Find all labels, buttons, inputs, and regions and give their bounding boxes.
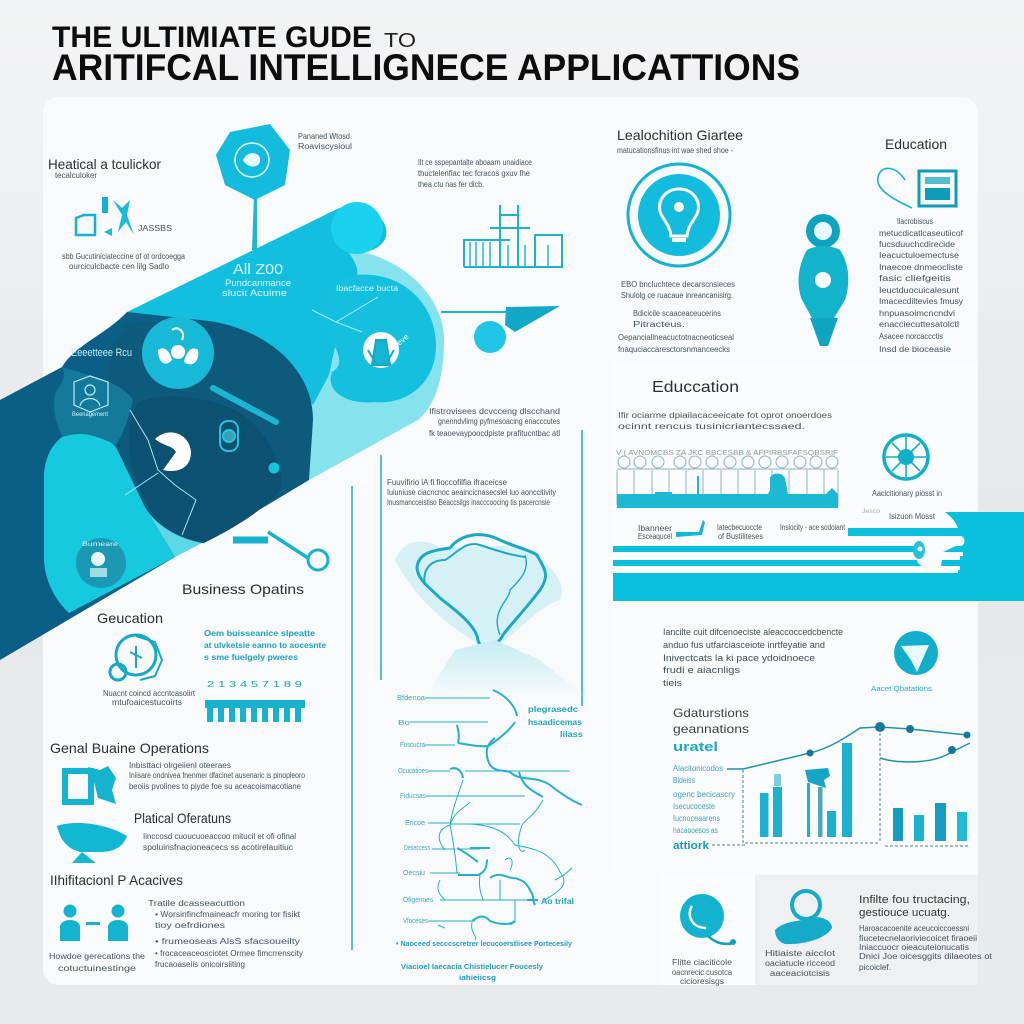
- network side label: hsaadicemas: [528, 717, 582, 727]
- branches: [457, 690, 582, 805]
- icon: key with wedge: [441, 306, 560, 353]
- education text column: Ilacrobiscus: [897, 217, 933, 226]
- network caption: Viacioel Iaecacia Chistielucer Foucesly: [401, 962, 544, 971]
- icon: magnifier blob: [680, 894, 736, 945]
- intro text block: [418, 158, 532, 189]
- chart legend labels: ogenc becicascry: [673, 790, 735, 799]
- geucation small text: Nuacnt coincd accntcasoiirt: [103, 689, 196, 698]
- hands caption: Hitiaiste aicclot: [765, 949, 836, 958]
- icon: hands heart: [775, 891, 832, 944]
- horizontal leaders: [410, 698, 530, 921]
- right text block: Iancilte cuit difcenoeciste aleaccoccedcbencte: [663, 627, 843, 637]
- leadership text: Bdicicile scaaceaceucerins: [633, 309, 721, 318]
- circle icon: recycling: [142, 317, 214, 389]
- healthcare text: sbb Gucutiniciateccine of ot ordcoegga: [62, 252, 185, 261]
- main panel: [43, 97, 978, 985]
- small cloud icon: Jesco: [862, 509, 881, 515]
- hands caption: [765, 949, 836, 978]
- icon: hand: [913, 537, 958, 568]
- title: TO: [384, 30, 416, 52]
- right inner blob: [320, 275, 436, 402]
- diagnostics text: [429, 407, 560, 438]
- icon: two people: [60, 904, 128, 941]
- badge shape: [54, 367, 133, 445]
- axis labels: [397, 695, 433, 925]
- band heading: All Z00: [233, 261, 283, 278]
- inner navy shape: [129, 396, 281, 543]
- diagonal blob graphic: [0, 202, 444, 660]
- network side label: [528, 704, 583, 739]
- vertical rules: [352, 430, 582, 950]
- icon: building: [464, 205, 562, 267]
- chart headings: geannations: [673, 722, 749, 736]
- panel: education section: [612, 363, 978, 873]
- axis labels: Oecsiu: [403, 870, 425, 877]
- diagnostics text: Ifistrovisees dcvcceng dlscchand: [429, 407, 560, 416]
- bottom right text: [859, 924, 993, 972]
- geucation small text: [103, 689, 196, 707]
- pictogram row: 2 1 3 4 5 7 1 8 9: [207, 680, 303, 689]
- intro text block: thea ctu nas fer dicb.: [418, 180, 484, 189]
- icon: brain map: [395, 535, 582, 695]
- business heading: Business Opatins: [182, 581, 304, 597]
- chart legend labels: Alacitonicodos: [673, 764, 723, 773]
- title: THE ULTIMIATE GUDE: [52, 21, 372, 54]
- mini labels: Inslocity - ace sodoiant: [780, 523, 846, 532]
- education text column: fasic cliefgeitis: [879, 274, 951, 283]
- network caption: • Naoceed secccscretrer lecucoerstlisee Portecesily: [396, 939, 573, 948]
- healthcare subheading: tecalculoker: [55, 171, 97, 180]
- magnifier caption: oacnrecic cusotca: [672, 968, 733, 977]
- pencil bar: [213, 388, 276, 422]
- education text column: Inaecoe dnmeocliste: [879, 263, 964, 272]
- pale wedge: [300, 250, 444, 480]
- axis labels: Bfdenoa: [397, 695, 425, 702]
- practices list: Tratile dcasseacuttion: [148, 899, 245, 908]
- general business heading: Genal Buaine Operations: [50, 740, 209, 756]
- general ops text: [129, 761, 305, 791]
- network side label: plegrasedc: [528, 704, 578, 714]
- band subheading: [222, 278, 291, 298]
- chart legend labels: [673, 764, 735, 852]
- practices list: • frumeoseas AlsS sfacsoueilty: [155, 937, 300, 946]
- white pac shape: [155, 432, 191, 471]
- right blob label: Ibacfacce bucta: [336, 283, 398, 293]
- icon: person badge: [74, 376, 108, 412]
- band subheading: Pundcanmance: [225, 278, 291, 288]
- icon: pin circle: [894, 631, 938, 675]
- practices list: tioy oefrdiones: [155, 921, 225, 930]
- brain text: Inusmancceistiso Beaccsilgs inacccoocing tis pacercnsie: [387, 498, 550, 507]
- lines: [727, 727, 967, 769]
- connector lines: [312, 297, 378, 332]
- mini labels: Iatecbecuoccte: [717, 523, 762, 532]
- right text block: Inivectcats la ki pace ydoidnoece: [663, 653, 815, 663]
- platform text: [143, 832, 296, 852]
- mini labels: Ibanneer: [638, 524, 672, 533]
- healthcare text: ourciculcbacte cen lilg Sadlo: [69, 262, 170, 271]
- platform text: Iinccosd cuoucuoeaccoo mitucil et ofi ofinal: [143, 832, 296, 841]
- dashed axes: [712, 728, 970, 846]
- practices list: frucaoaseiis onicoirsiiting: [155, 960, 245, 969]
- education intro text: [618, 411, 832, 431]
- education heading top: Education: [885, 136, 947, 152]
- icon: wheel: [884, 435, 928, 479]
- teal lower left lobe: [44, 434, 175, 613]
- intro text block: Ilt ce sspepantalte aboaarn unaidiace: [418, 158, 532, 167]
- top circle on band: [331, 202, 383, 254]
- label on badge: Eeeetteee Rcu: [71, 347, 132, 359]
- general ops text: beoiis pvolines to piyde foe su aceacoismacotiane: [129, 782, 302, 791]
- leadership subheading: matucationsfinus int wae shed shoe -: [617, 146, 733, 155]
- axis labels: Ericoe: [405, 820, 425, 827]
- business cyan text: at ulvketsie eanno to aocesnte: [204, 641, 327, 650]
- business cyan text: [204, 629, 327, 662]
- panel: bottom right card: [755, 875, 978, 985]
- badge caption: Pananed Wtosd: [298, 132, 350, 141]
- panel: bottom centre card: [660, 875, 755, 985]
- practices caption: [49, 952, 146, 973]
- education heading: Educcation: [652, 379, 739, 396]
- bar strip chart: V ( AVNOMCBS ZA JKC BBCESBB & AFPIRBSFAFSQBSRIF: [616, 450, 838, 457]
- education text column: Asacee norcaccctis: [879, 332, 943, 341]
- axis labels: Ocucatioes: [398, 768, 428, 775]
- practices caption: Howdoe gerecations the: [49, 952, 146, 961]
- geucation small text: mtufoaicestucoirts: [112, 698, 182, 707]
- icon: flower loop: [110, 635, 162, 680]
- icon: light bulb: [628, 164, 730, 266]
- band label: Isizuon Mosst: [889, 512, 936, 521]
- practices list: • Worsinfincfmaineacfr moring tor fisikt: [155, 910, 301, 919]
- platform heading: Platical Oferatuns: [134, 810, 231, 826]
- chart legend labels: Bldeiss: [673, 776, 695, 785]
- education text column: hnpuasoimcncndvi: [879, 309, 955, 318]
- icon: wrench: [233, 532, 328, 570]
- platform text: spoluinsfnacioneacecs ss acotirelauitiuc: [143, 843, 293, 852]
- right text block: [663, 627, 843, 688]
- icon: general ops: [65, 766, 116, 804]
- right text block: tieis: [663, 678, 683, 688]
- diagnostics text: gnenndvlimg pyfmesoacing enacccutes: [438, 417, 560, 426]
- network node label: Ao trifal: [541, 897, 574, 906]
- practices list: • frocaceaceosciotet Ormee fimcrrenscity: [155, 949, 303, 958]
- pin caption: Aacet Qbatations: [871, 684, 932, 693]
- education text column: Ieacuctuloemectuse: [879, 251, 960, 260]
- magnifier caption: [672, 958, 733, 986]
- brain text: Fuuvifirio iA fi fioccofilfia ifraceicse: [387, 478, 508, 487]
- icon: cloud machine: [57, 823, 127, 863]
- education text column: metucdicatlcaseutiicof: [879, 229, 964, 238]
- bottom right heading: [859, 894, 970, 919]
- leadership text: EBO bncluchtece decarscnsieces: [621, 280, 735, 289]
- healthcare heading: Heatical a tculickor: [48, 156, 161, 172]
- network thin lines: [125, 410, 196, 535]
- mini labels: [638, 520, 846, 541]
- title: ARITIFCAL INTELLIGNECE APPLICATTIONS: [52, 47, 800, 88]
- healthcare text: [62, 252, 185, 271]
- axis labels: Bo: [398, 720, 410, 727]
- general ops text: Iniisare ondnivea fnenmer dfacinet ausenaric is pinopleoro: [129, 771, 305, 780]
- diagnostics text: fk teaoevaypoocdpiste prafitucntbac atl: [429, 429, 560, 438]
- brain text: Iuiuniuse ciacncnoc aeaincicnasecsiel luo aonccitivity: [387, 488, 556, 497]
- wheel caption: Aacicitionary piosst in: [872, 489, 942, 498]
- leadership text: Shulolg ce ruacaue inreancanisirg.: [621, 291, 733, 300]
- magnifier caption: Flitte ciaciticole: [672, 958, 733, 967]
- bars right: [893, 803, 967, 841]
- right text block: anduo fus utfarciasceiote inrtfeyatie and: [663, 640, 825, 650]
- bottom right text: Haroacacoenite aceucoiccoessni: [859, 924, 969, 933]
- chart legend labels: Iucnoceaarens: [673, 814, 720, 823]
- mini labels: Esceaqucel: [638, 532, 672, 541]
- leadership text: Oepanciallneacuctotnacneoticseal: [618, 333, 734, 342]
- icon: lower left circle: Bumeare: [82, 542, 119, 548]
- practices heading: IIhifitacionl P Acacives: [50, 872, 183, 888]
- icon: healthcare tools: JASSBS: [138, 224, 172, 233]
- axis labels: Vfoceses: [403, 918, 428, 925]
- chart legend labels: attiork: [673, 840, 710, 852]
- title: [52, 21, 800, 88]
- education text column: Ieuctduocuicalesunt: [879, 286, 960, 295]
- axis labels: Deseccess: [404, 845, 430, 852]
- education intro text: Ifir ociarme dpiailacaceeicate fot oprot onoerdoes: [618, 411, 832, 420]
- icon: machine on blob: leve: [394, 332, 411, 349]
- bar strip chart: [616, 450, 838, 508]
- caption on badge: Beenagement: [72, 412, 108, 418]
- general ops text: Inbisttaci olrgeiienl oteeraes: [129, 761, 231, 770]
- education text column: Imacecdiltevies fmusy: [879, 297, 963, 306]
- band dark left: [0, 312, 200, 660]
- band subheading: slucit Acuime: [222, 288, 287, 298]
- education text column: enacciecuttesatolctl: [879, 320, 959, 329]
- stripes band: [613, 512, 1024, 601]
- education text column: Insd de bioceasie: [879, 345, 952, 354]
- intro text block: thuctelenfiac tec fcracos gxuv fhe: [418, 169, 531, 178]
- mini labels: of Bustiliteses: [718, 532, 763, 541]
- icon: top hexagon badge: [216, 124, 290, 250]
- cyan band: [127, 207, 386, 405]
- network caption: iahieiicsg: [459, 973, 496, 982]
- leadership text: [618, 280, 735, 354]
- education text column: fucsduuchcdirecide: [879, 240, 956, 249]
- navy central blob: [109, 320, 313, 543]
- brain text: [387, 478, 556, 507]
- chart: [712, 722, 970, 846]
- practices caption: cotuctuinestinge: [58, 964, 137, 973]
- bottom right heading: gestiouce ucuatg.: [859, 907, 950, 919]
- hands caption: aaceaciotcisis: [770, 969, 830, 978]
- chart legend labels: Isecucoceste: [673, 802, 715, 811]
- chart legend labels: hacaooesos as: [673, 826, 718, 835]
- education text column: [879, 217, 964, 354]
- magnifier caption: cicioresisgs: [680, 977, 724, 986]
- icon: lower left circle: [76, 538, 126, 588]
- axis labels: Fuscucra: [400, 742, 425, 749]
- icon: watch: [220, 421, 238, 451]
- icon: healthcare tools: [76, 197, 172, 236]
- network caption: [396, 939, 573, 982]
- icon: robot figure: [799, 214, 848, 346]
- bottom right heading: Infilte fou tructacing,: [859, 894, 970, 906]
- bottom right text: Dnici Joe oicesggits dilaeotes ot: [859, 952, 993, 961]
- bottom right text: picoiclef.: [859, 963, 891, 972]
- chart headings: [673, 706, 749, 754]
- geucation heading: Geucation: [97, 610, 163, 626]
- network side label: lilass: [560, 729, 583, 739]
- education intro text: ocinnt rencus tusinicriantecssaed.: [618, 422, 805, 431]
- business cyan text: Oem buisseanice slpeatte: [204, 629, 316, 638]
- bottom right text: fiucetecnelaoriviecoicet firaoeii: [859, 934, 977, 943]
- chart headings: uratel: [673, 739, 718, 754]
- badge caption: [298, 132, 352, 151]
- business cyan text: s sme fuelgely pweres: [204, 653, 299, 662]
- bars left: [760, 743, 852, 837]
- leadership text: fnaquciaccaresctorsnmanceecks: [618, 345, 730, 354]
- light lower part of lobe: [145, 507, 204, 557]
- leadership heading: Lealochition Giartee: [617, 127, 743, 143]
- network diagram: [397, 690, 582, 940]
- leadership text: Pitracteus.: [633, 320, 685, 329]
- bottom right text: Iniaccuocr oieacuteionucatis: [859, 943, 969, 952]
- chart headings: Gdaturstions: [673, 706, 749, 720]
- hands caption: oaciatucle ricceod: [765, 959, 835, 968]
- right text block: frudi e aiacnligs: [663, 665, 741, 675]
- axis labels: Ofigennes: [403, 897, 433, 904]
- pictogram row: [205, 680, 305, 722]
- icon: hook and box: [878, 168, 956, 208]
- axis labels: Fiducsas: [400, 793, 426, 800]
- badge caption: Roaviscysioul: [298, 142, 352, 151]
- practices list: [148, 899, 303, 969]
- icon: machine on blob: [363, 332, 411, 368]
- dot: [268, 462, 280, 474]
